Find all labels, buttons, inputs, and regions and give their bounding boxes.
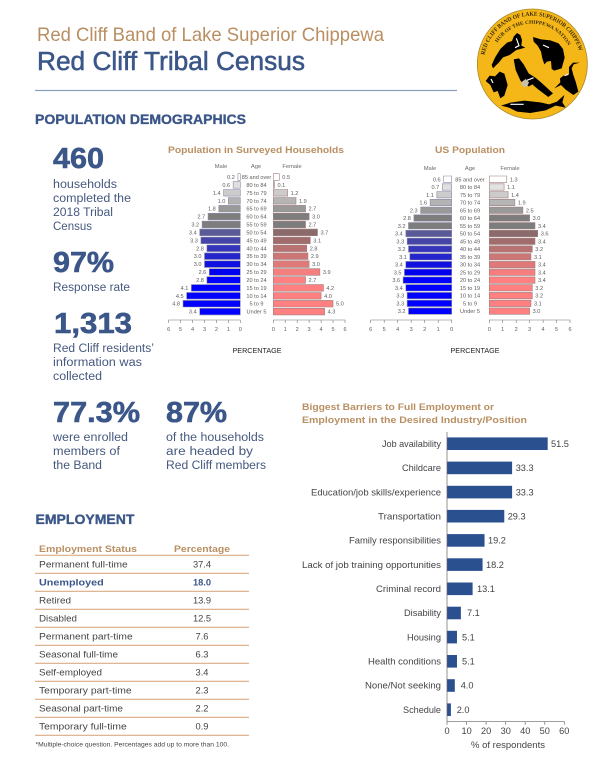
female value labels: 4.0	[324, 294, 332, 300]
category labels: Childcare	[402, 463, 441, 473]
age labels: 10 to 14	[246, 294, 267, 300]
table rows: Seasonal full-time	[39, 650, 118, 660]
age labels: 60 to 64	[246, 215, 267, 221]
header subtitle: Red Cliff Band of Lake Superior Chippewa	[37, 24, 384, 46]
age labels: 35 to 39	[460, 255, 480, 261]
axes: 0	[488, 327, 491, 333]
age labels: 40 to 44	[246, 246, 267, 252]
age labels: 70 to 74	[246, 199, 267, 205]
value labels: 7.1	[467, 608, 480, 618]
male value labels: 4.8	[172, 302, 180, 308]
footnote: *Multiple-choice question. Percentages add up to more than 100.	[36, 742, 229, 749]
male bars	[403, 176, 452, 314]
male value labels: 1.4	[213, 191, 221, 197]
table rows: 18.0	[193, 578, 211, 588]
category labels: Transportation	[378, 511, 441, 521]
table rows: Self-employed	[39, 668, 102, 678]
female value labels: 2.7	[308, 207, 316, 213]
female value labels: 1.3	[510, 177, 518, 183]
age labels: 20 to 24	[246, 278, 267, 284]
female value labels: 0.1	[278, 183, 285, 189]
category labels: Housing	[407, 632, 441, 642]
male bars	[183, 174, 240, 315]
age labels: 50 to 54	[246, 230, 267, 236]
stat: 87% of households: of the households	[166, 432, 264, 444]
axes: 2	[515, 327, 518, 333]
axis: 30	[501, 726, 511, 736]
stat: 97% response rate: Response rate	[53, 282, 130, 294]
stat: 77.3% enrolled: were enrolled	[52, 432, 128, 444]
table rows: Temporary part-time	[39, 686, 132, 696]
male value labels: 3.5	[394, 270, 402, 276]
chart: barriers to employment	[302, 402, 569, 750]
male value labels: 4.1	[181, 286, 188, 292]
axes: 1	[501, 327, 504, 333]
axis: 0	[444, 726, 450, 736]
female value labels: 3.1	[313, 238, 321, 244]
age labels: 65 to 69	[246, 207, 267, 213]
axes: 6	[167, 327, 170, 333]
male value labels: 3.3	[396, 239, 404, 245]
axes: 0	[450, 327, 453, 333]
age labels: 15 to 19	[246, 286, 267, 292]
male value labels: 0.2	[227, 175, 235, 181]
category labels	[302, 439, 441, 715]
female value labels: 4.3	[328, 310, 335, 316]
age labels: 55 to 59	[246, 222, 267, 228]
stat: 1,313 residents: collected	[53, 371, 102, 383]
male value labels: 1.8	[208, 207, 216, 213]
female value labels: 3.2	[535, 247, 543, 253]
stat: 460 households: 2018 Tribal	[53, 207, 113, 219]
male value labels: 3.4	[395, 263, 403, 269]
male value labels: 3.4	[395, 232, 403, 238]
age labels: 15 to 19	[460, 286, 480, 292]
female value labels: 5.0	[336, 302, 344, 308]
male value labels: 2.3	[410, 208, 418, 214]
male value labels: 3.4	[395, 286, 403, 292]
age labels: 35 to 39	[246, 254, 267, 260]
table rows: Disabled	[39, 614, 77, 624]
value labels: 51.5	[551, 439, 569, 449]
male value labels: 2.6	[199, 270, 206, 276]
age labels: 50 to 54	[460, 232, 480, 238]
stat: 97% response rate	[53, 247, 130, 294]
female value labels: 4.2	[326, 286, 334, 292]
male value labels: 1.6	[419, 201, 427, 207]
category labels: Family responsibilities	[349, 536, 441, 546]
axes: 6	[343, 327, 347, 333]
axes: 2	[215, 327, 218, 333]
female value labels: 3.0	[533, 309, 540, 315]
column headers: Female	[500, 166, 520, 172]
female value labels: 2.7	[308, 222, 316, 228]
stat: 97% response rate: 97%	[53, 247, 114, 279]
axes: 3	[410, 327, 413, 333]
chart title: US Population	[435, 145, 505, 155]
category labels: Lack of job training opportunities	[302, 560, 441, 570]
axes: 1	[437, 327, 440, 333]
male value labels: 3.1	[399, 255, 407, 261]
value labels: 5.1	[462, 656, 475, 666]
male value labels: 4.5	[176, 294, 184, 300]
male value labels: 3.6	[392, 278, 400, 284]
table rows: 2.3	[196, 686, 208, 696]
category labels: Disability	[404, 608, 441, 618]
female value labels: 3.0	[312, 215, 320, 221]
axes: 4	[320, 327, 323, 333]
age labels: 25 to 29	[460, 270, 480, 276]
age labels: 20 to 24	[460, 278, 480, 284]
male value labels: 3.0	[194, 262, 202, 268]
category labels: Health conditions	[368, 656, 441, 666]
age labels: 45 to 49	[246, 238, 267, 244]
male value labels: 3.0	[194, 254, 202, 260]
value labels: 4.0	[461, 681, 473, 691]
chart title: Population in Surveyed Households	[168, 145, 344, 155]
chart: population pyramid, US population	[369, 145, 572, 355]
age labels: 55 to 59	[460, 224, 480, 230]
male value labels: 3.3	[396, 302, 404, 308]
axes	[369, 320, 572, 355]
stat: 460 households: households	[53, 179, 117, 191]
value labels: 19.2	[488, 536, 506, 546]
axes: 2	[423, 327, 426, 333]
stat: 1,313 residents: 1,313	[54, 308, 132, 340]
female value labels: 3.4	[538, 270, 546, 276]
table: employment status	[35, 544, 249, 735]
age labels: 80 to 84	[460, 185, 480, 191]
chart title: Employment in the Desired Industry/Position	[302, 415, 527, 426]
table rows: Temporary full-time	[39, 722, 127, 732]
female value labels	[278, 175, 344, 316]
female value labels: 3.4	[538, 239, 546, 245]
stat: 87% of households: are headed by	[166, 446, 253, 458]
age labels: 70 to 74	[460, 201, 480, 207]
male value labels: 3.2	[191, 222, 199, 228]
female value labels: 1.9	[299, 199, 307, 205]
male value labels	[172, 175, 235, 316]
axes: 5	[331, 327, 335, 333]
table header: Percentage	[174, 544, 230, 555]
axes: 3	[308, 327, 311, 333]
female value labels: 2.7	[308, 278, 316, 284]
axes: 0	[272, 327, 275, 333]
stat: 1,313 residents: information was	[53, 357, 142, 369]
value labels: 13.1	[477, 584, 495, 594]
axes: 6	[369, 327, 372, 333]
age labels: 80 to 84	[246, 183, 267, 189]
chart title: Biggest Barriers to Full Employment or	[302, 402, 494, 413]
female value labels: 3.0	[533, 216, 540, 222]
table rows: Seasonal part-time	[39, 704, 123, 714]
male value labels: 0.7	[432, 185, 439, 191]
axes: 4	[542, 327, 545, 333]
stat: 1,313 residents	[53, 308, 154, 383]
stat: 87% of households: 87%	[166, 397, 227, 429]
age labels	[242, 175, 271, 316]
female value labels: 3.1	[534, 255, 542, 261]
axes: 5	[383, 327, 386, 333]
axes: 2	[296, 327, 299, 333]
axis: 60	[559, 726, 569, 736]
icon: tribal seal	[476, 8, 588, 120]
chart title	[302, 402, 527, 426]
female value labels	[507, 177, 548, 315]
stat: 87% of households: Red Cliff members	[166, 460, 266, 472]
male value labels: 3.4	[189, 310, 197, 316]
table rows: 12.5	[193, 614, 211, 624]
axes: 4	[396, 327, 399, 333]
female value labels: 2.9	[311, 254, 319, 260]
value labels: 5.1	[462, 632, 475, 642]
female bars	[489, 176, 538, 314]
male value labels: 3.2	[398, 247, 406, 253]
female value labels: 0.5	[282, 175, 290, 181]
male value labels: 1.1	[426, 193, 434, 199]
female value labels: 3.4	[538, 224, 546, 230]
axis: 40	[520, 726, 530, 736]
table rows: 2.2	[196, 704, 208, 714]
table rows: 13.9	[193, 596, 211, 606]
axes: 3	[203, 327, 206, 333]
age labels: 30 to 34	[460, 263, 480, 269]
age labels: 25 to 29	[246, 270, 267, 276]
axes	[167, 320, 347, 355]
female value labels: 1.9	[518, 201, 526, 207]
axis	[444, 432, 569, 750]
stat: 1,313 residents: Red Cliff residents’	[53, 343, 154, 355]
age labels: 60 to 64	[460, 216, 480, 222]
female value labels: 1.4	[511, 193, 519, 199]
column headers	[215, 164, 302, 170]
table rows: Permanent part-time	[39, 632, 133, 642]
male value labels: 2.7	[197, 215, 205, 221]
axes: PERCENTAGE	[232, 348, 282, 355]
female value labels: 3.4	[538, 278, 546, 284]
axis: 10	[461, 726, 472, 736]
category labels: Criminal record	[376, 584, 441, 594]
female value labels: 3.2	[535, 294, 543, 300]
category labels: Schedule	[403, 705, 441, 715]
table rows: 37.4	[193, 560, 211, 570]
female value labels: 3.0	[312, 262, 320, 268]
age labels: 65 to 69	[460, 208, 480, 214]
female value labels: 3.4	[538, 263, 546, 269]
section heading: employment: EMPLOYMENT	[36, 512, 135, 527]
category labels: Education/job skills/experience	[311, 487, 441, 497]
female value labels: 2.5	[526, 208, 534, 214]
male value labels: 3.3	[396, 294, 404, 300]
column headers: Female	[282, 164, 302, 170]
female value labels: 1.1	[507, 185, 515, 191]
axes: 4	[191, 327, 194, 333]
male value labels: 3.2	[398, 224, 406, 230]
stat: 460 households: completed the	[53, 193, 131, 205]
stat: 87% of households	[166, 397, 266, 472]
axes: 1	[227, 327, 230, 333]
section heading: population demographics: POPULATION DEMOGRAPHICS	[35, 112, 246, 127]
age labels: 40 to 44	[460, 247, 480, 253]
age labels: 85 and over	[455, 177, 485, 183]
axis: 50	[540, 726, 550, 736]
title: Red Cliff Tribal Census	[37, 48, 305, 76]
axes: 6	[568, 327, 572, 333]
age labels: Under 5	[247, 310, 266, 316]
age labels: 5 to 9	[250, 302, 264, 308]
table rows: Permanent full-time	[39, 560, 128, 570]
stat: 77.3% enrolled: members of	[53, 446, 121, 458]
axes: 1	[284, 327, 287, 333]
female value labels: 3.1	[534, 302, 542, 308]
category labels: None/Not seeking	[365, 681, 441, 691]
axes: 5	[179, 327, 182, 333]
table rows: 7.6	[196, 632, 208, 642]
column headers: Age	[251, 164, 261, 170]
age labels: 45 to 49	[460, 239, 480, 245]
age labels: 5 to 9	[463, 302, 477, 308]
age labels: 85 and over	[242, 175, 271, 181]
male value labels: 3.4	[189, 230, 197, 236]
stat: 460 households: Census	[53, 221, 92, 233]
female value labels: 3.6	[541, 232, 548, 238]
male value labels: 3.3	[190, 238, 198, 244]
age labels: 75 to 79	[460, 193, 480, 199]
stat: 77.3% enrolled: the Band	[53, 460, 102, 472]
age labels: 30 to 34	[246, 262, 267, 268]
table header: Employment Status	[39, 544, 137, 555]
age labels: Under 5	[460, 309, 480, 315]
value labels: 2.0	[457, 705, 469, 715]
female value labels: 1.2	[291, 191, 298, 197]
axes: PERCENTAGE	[450, 348, 500, 355]
column headers	[424, 166, 520, 172]
female value labels: 3.9	[323, 270, 331, 276]
male value labels	[392, 177, 441, 315]
table rows: Unemployed	[39, 578, 104, 588]
male value labels: 2.8	[196, 278, 204, 284]
stat: 77.3% enrolled	[52, 397, 140, 472]
table rows: Retired	[39, 596, 71, 606]
stat: 460 households	[53, 143, 131, 233]
table rows	[39, 560, 211, 732]
bars	[447, 437, 548, 716]
age labels: 75 to 79	[246, 191, 267, 197]
table rows: 0.9	[196, 722, 208, 732]
icon: tribal seal: RED CLIFF BAND OF LAKE SUPERIOR CHIPPEWA	[480, 12, 583, 55]
column headers: Age	[465, 166, 475, 172]
axes: 0	[239, 327, 242, 333]
male value labels: 1.0	[218, 199, 225, 205]
value labels: 18.2	[486, 560, 504, 570]
axis: % of respondents	[471, 740, 545, 750]
stat: 460 households: 460	[53, 143, 104, 175]
column headers: Male	[215, 164, 227, 170]
chart: population pyramid, surveyed households	[167, 145, 347, 355]
age labels	[455, 177, 485, 315]
female value labels: 3.2	[535, 286, 543, 292]
value labels	[457, 439, 569, 715]
axes: 5	[555, 327, 558, 333]
table rows: 3.4	[196, 668, 208, 678]
male value labels: 0.6	[222, 183, 230, 189]
column headers: Male	[424, 166, 436, 172]
value labels: 29.3	[508, 511, 526, 521]
male value labels: 2.8	[403, 216, 411, 222]
female value labels: 3.7	[320, 230, 328, 236]
male value labels: 3.2	[398, 309, 406, 315]
value labels: 33.3	[516, 463, 534, 473]
male value labels: 2.8	[196, 246, 204, 252]
table header	[39, 544, 230, 555]
value labels: 33.3	[516, 487, 534, 497]
stat: 77.3% enrolled: 77.3%	[53, 397, 140, 429]
age labels: 10 to 14	[460, 294, 480, 300]
table rows: 6.3	[196, 650, 208, 660]
female bars	[273, 174, 333, 315]
female value labels: 2.8	[310, 246, 317, 252]
male value labels: 0.6	[433, 177, 441, 183]
category labels: Job availability	[382, 439, 441, 449]
axis: 20	[481, 726, 491, 736]
icon: tribal seal: HUB OF THE CHIPPEWA NATION	[494, 20, 571, 46]
axes: 3	[528, 327, 531, 333]
